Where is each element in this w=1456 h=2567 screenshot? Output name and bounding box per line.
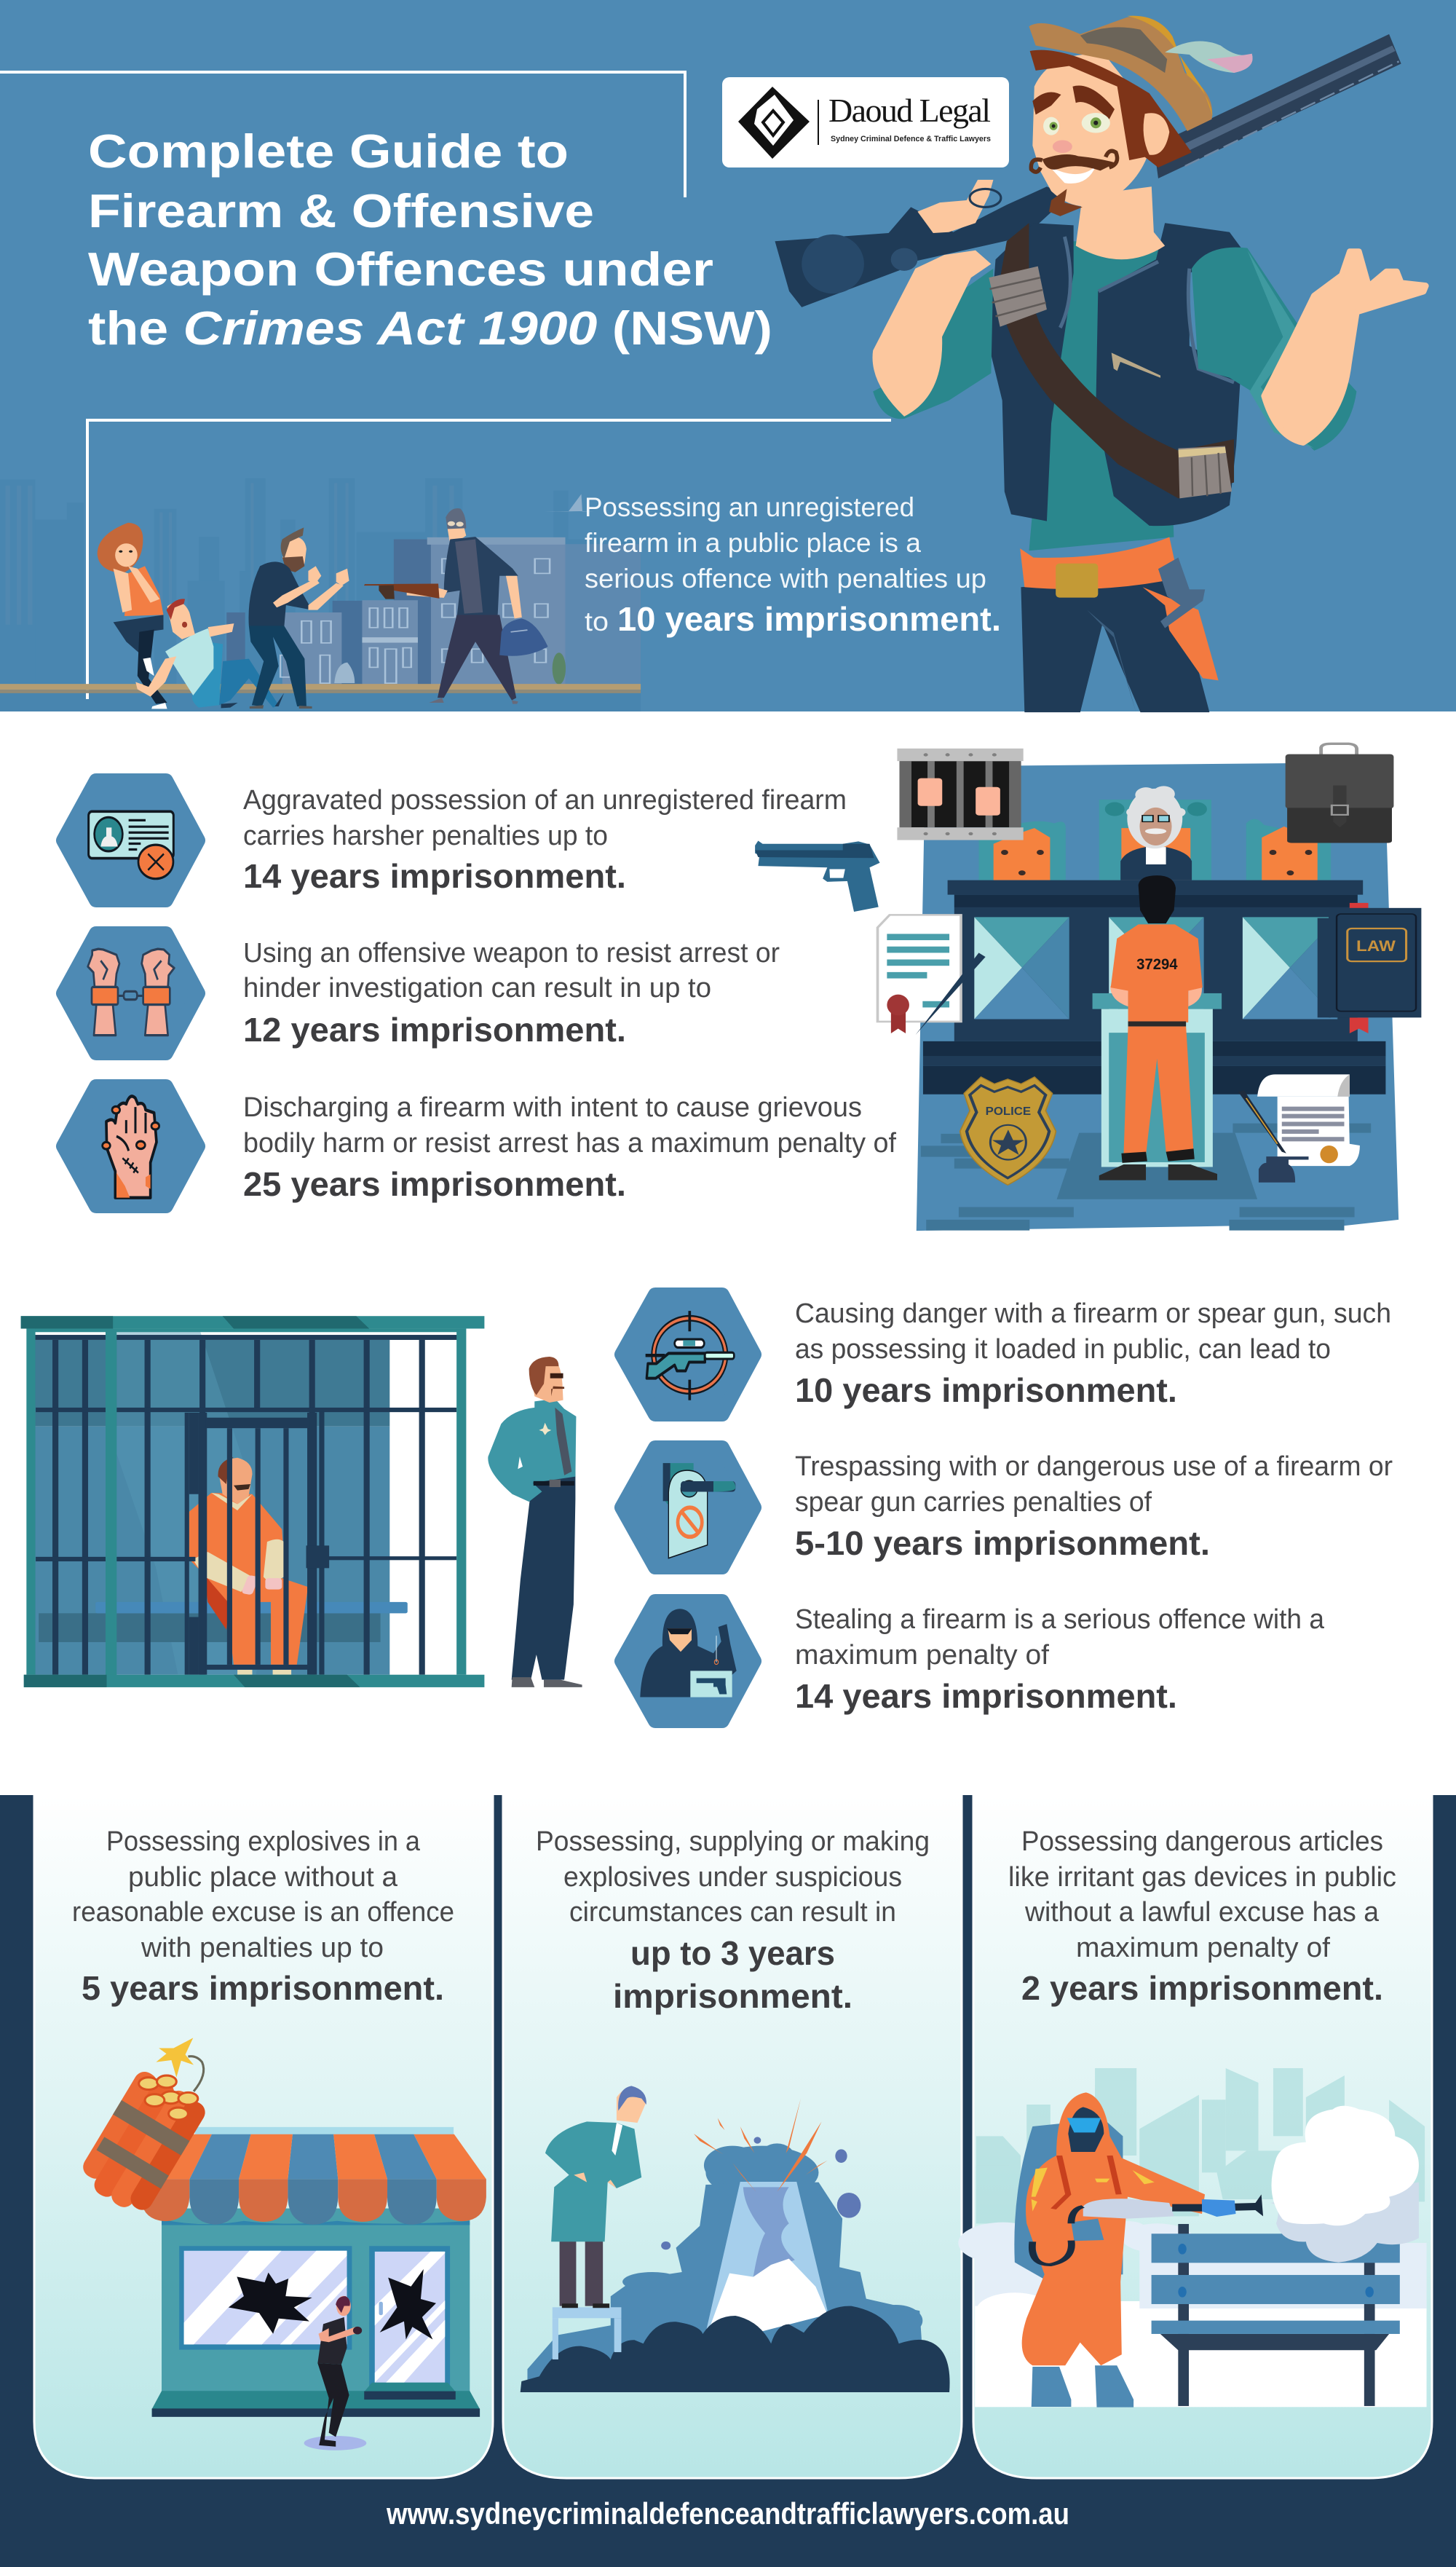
title: Complete Guide to: [88, 125, 569, 178]
explosion with scientist: [521, 2086, 950, 2392]
card 1 text: 5 years imprisonment.: [82, 1969, 444, 2007]
text block 3: Discharging a firearm with intent to cause grievous: [243, 1092, 862, 1123]
hair: [1030, 50, 1192, 167]
hazmat suit: [1014, 2092, 1263, 2408]
right sleeve and arm: [1192, 248, 1356, 451]
courtroom illustration: [755, 744, 1421, 1231]
bearded man: [249, 527, 349, 709]
text block 3: 25 years imprisonment.: [243, 1165, 626, 1203]
icon group: three left hexagons: [63, 781, 198, 1206]
prisoner: 37294: [1136, 955, 1178, 973]
text block 2: Using an offensive weapon to resist arrest or: [243, 938, 780, 969]
vest: [989, 223, 1074, 521]
belt, buckle and knife: [1020, 537, 1179, 589]
shotgun: [775, 34, 1401, 307]
card 3 text: Possessing dangerous articles: [1021, 1826, 1383, 1857]
man throwing: [304, 2296, 366, 2450]
hero paragraph: Possessing an unregistered: [585, 492, 914, 522]
chairs: [978, 800, 1331, 880]
text block 2: [243, 938, 780, 1049]
footer panel background: [0, 1795, 1456, 2567]
text block 4: 10 years imprisonment.: [795, 1371, 1177, 1409]
website url: www.sydneycriminaldefenceandtrafficlawyers.com.au: [386, 2496, 1069, 2531]
city background: [976, 2068, 1425, 2223]
card 1 text: reasonable excuse is an offence: [72, 1897, 454, 1928]
text block 3: [243, 1092, 896, 1203]
hero paragraph: to: [585, 607, 609, 636]
floor strips: [921, 1124, 1371, 1231]
text block 6: maximum penalty of: [795, 1640, 1049, 1671]
hero paragraph: [585, 492, 1001, 638]
dark smoke foreground: [521, 2306, 950, 2392]
frame line: top: [0, 72, 685, 197]
logo: Sydney Criminal Defence & Traffic Lawyers: [831, 135, 991, 143]
text block 2: 12 years imprisonment.: [243, 1011, 626, 1049]
podium: [1093, 993, 1222, 1167]
pistol: [755, 840, 880, 912]
face: [1032, 54, 1152, 207]
torso t-shirt: [1029, 241, 1174, 551]
hexagon icon: ID card rejected: [63, 781, 198, 900]
text block 3: bodily harm or resist arrest has a maximum penalty of: [243, 1128, 896, 1159]
dynamite: [74, 2038, 210, 2220]
woman: [98, 523, 167, 709]
briefcase: [1286, 744, 1393, 843]
shop with dynamite: [74, 2038, 486, 2450]
text block 1: [243, 785, 847, 895]
spray cloud: [1270, 2106, 1419, 2263]
hero paragraph: firearm in a public place is a: [585, 528, 921, 558]
law book: LAW: [1356, 937, 1396, 955]
neck: [1076, 186, 1165, 259]
hero paragraph: serious offence with penalties up: [585, 564, 986, 594]
cage with prisoner: [21, 1316, 484, 1687]
brows, eyes and nose: [1032, 86, 1115, 119]
hazmat sprayer with bench: [958, 2068, 1427, 2408]
logo: [722, 77, 1009, 167]
bandolier: [998, 223, 1234, 498]
bench: [1152, 2224, 1400, 2406]
police badge: [960, 1077, 1056, 1185]
text block 1: 14 years imprisonment.: [243, 857, 626, 895]
hat: [1029, 17, 1212, 131]
card 2 text: imprisonment.: [613, 1977, 852, 2015]
robber with gun and bag: [364, 508, 548, 704]
card 1 text: public place without a: [128, 1862, 398, 1893]
text block 5: 5-10 years imprisonment.: [795, 1524, 1210, 1562]
prisoner: [1099, 875, 1217, 1180]
card 3 text: [1008, 1826, 1396, 2007]
hero banner background: [0, 0, 1456, 711]
text block 5: spear gun carries penalties of: [795, 1487, 1152, 1518]
seated man: [135, 599, 284, 708]
sidewalk: [0, 684, 641, 693]
hero paragraph: 10 years imprisonment.: [617, 600, 1001, 638]
text block 5: [795, 1451, 1393, 1562]
crowd figures: [98, 508, 548, 709]
hexagon icon: handcuffed fists: [63, 934, 198, 1053]
card 2 text: explosives under suspicious: [563, 1862, 902, 1893]
text block 4: as possessing it loaded in public, can lead to: [795, 1334, 1331, 1365]
card 3 text: like irritant gas devices in public: [1008, 1862, 1396, 1893]
prisoner: [189, 1457, 308, 1675]
police badge: POLICE: [986, 1105, 1031, 1118]
card 1 text: with penalties up to: [141, 1933, 384, 1963]
title: Firearm & Offensive: [88, 184, 594, 237]
logo: Daoud Legal: [828, 92, 991, 129]
text block 5: Trespassing with or dangerous use of a firearm or: [795, 1451, 1393, 1482]
hexagon icon: injured hand: [63, 1087, 198, 1206]
card 2 text: [536, 1826, 930, 2015]
card 1 text: Possessing explosives in a: [106, 1826, 421, 1857]
card 3: [973, 1795, 1432, 2478]
shop building: [152, 2209, 480, 2417]
card 2: [503, 1795, 962, 2478]
text block 1: carries harsher penalties up to: [243, 821, 608, 851]
smile and mustache: [1049, 166, 1096, 184]
law book: [1318, 903, 1421, 1033]
crowd scene: skyline and street: [0, 478, 641, 711]
feather: [1165, 41, 1253, 73]
text block 4: Causing danger with a firearm or spear gun, such: [795, 1298, 1391, 1329]
certificate with seal and pen: [877, 915, 986, 1035]
legs: [1021, 578, 1209, 712]
card 3 text: without a lawful excuse has a: [1024, 1897, 1380, 1928]
judge bench: [923, 880, 1385, 1095]
police officer: [488, 1357, 582, 1687]
frame: [21, 1316, 484, 1687]
title: [88, 125, 772, 355]
card 1: [34, 1795, 493, 2478]
title: the Crimes Act 1900 (NSW): [88, 301, 772, 355]
window with fists: [897, 749, 1024, 840]
text block 6: [795, 1604, 1325, 1715]
text block 1: Aggravated possession of an unregistered firearm: [243, 785, 847, 816]
left sleeve and arm: [873, 269, 993, 419]
card 2 text: Possessing, supplying or making: [536, 1826, 930, 1857]
white clouds at ground: [958, 2221, 1427, 2407]
text block 6: 14 years imprisonment.: [795, 1677, 1177, 1715]
bars: [33, 1335, 459, 1675]
text block 2: hinder investigation can result in up to: [243, 973, 711, 1003]
text block 4: [795, 1298, 1391, 1409]
title: Weapon Offences under: [88, 242, 713, 296]
smoke plume: [527, 2137, 925, 2383]
card 2 text: circumstances can result in: [569, 1897, 896, 1928]
jet: [705, 2182, 828, 2335]
sparks: [694, 2099, 828, 2192]
judge: [1120, 786, 1192, 880]
card 1 text: [72, 1826, 454, 2007]
icon group: three right hexagons: [622, 1295, 754, 1721]
floor panel: [917, 762, 1398, 1231]
hexagon icon: hooded thief: [622, 1601, 754, 1721]
scientist: [545, 2086, 646, 2359]
hunter character: [775, 16, 1425, 712]
card 2 text: up to 3 years: [630, 1934, 835, 1972]
frame line: lower: [87, 420, 891, 699]
card 3 text: 2 years imprisonment.: [1021, 1969, 1383, 2007]
text block 6: Stealing a firearm is a serious offence with a: [795, 1604, 1325, 1635]
card 3 text: maximum penalty of: [1076, 1933, 1330, 1963]
scroll, pen and ink: [1238, 1074, 1360, 1183]
hexagon icon: door hanger: [622, 1448, 754, 1567]
cell wall: [35, 1332, 408, 1675]
awning: [141, 2127, 486, 2225]
upper hand: [917, 180, 993, 233]
hexagon icon: rifle in crosshair: [622, 1295, 754, 1414]
